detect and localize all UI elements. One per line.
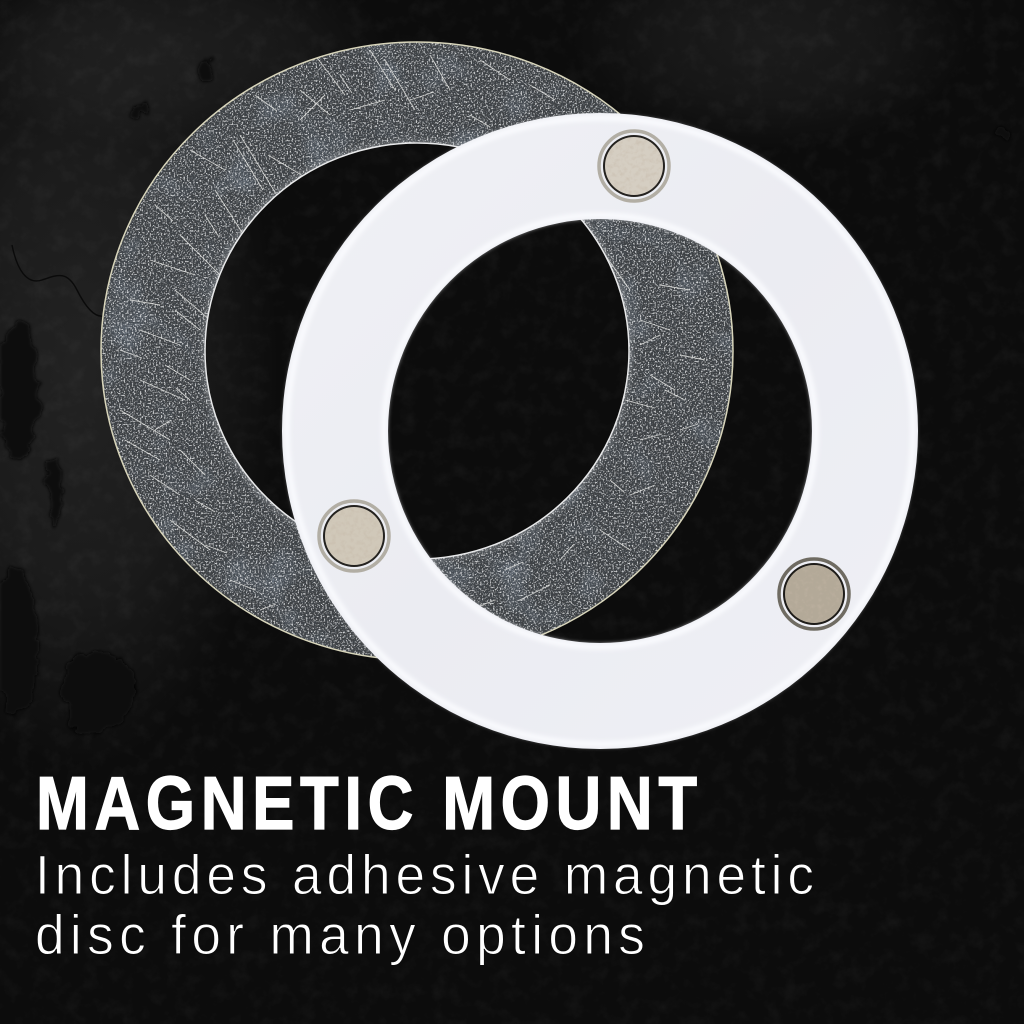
- metal adhesive disc ring: [90, 30, 750, 670]
- magnet: top: [599, 131, 669, 201]
- description text: disc for many options: [35, 904, 645, 966]
- magnet: lower left: [319, 501, 389, 571]
- magnet: lower right: [779, 559, 849, 629]
- description text: [35, 844, 814, 966]
- title: MAGNETIC MOUNT: [36, 761, 697, 845]
- white magnetic ring: [282, 113, 918, 749]
- description text: Includes adhesive magnetic: [35, 844, 814, 906]
